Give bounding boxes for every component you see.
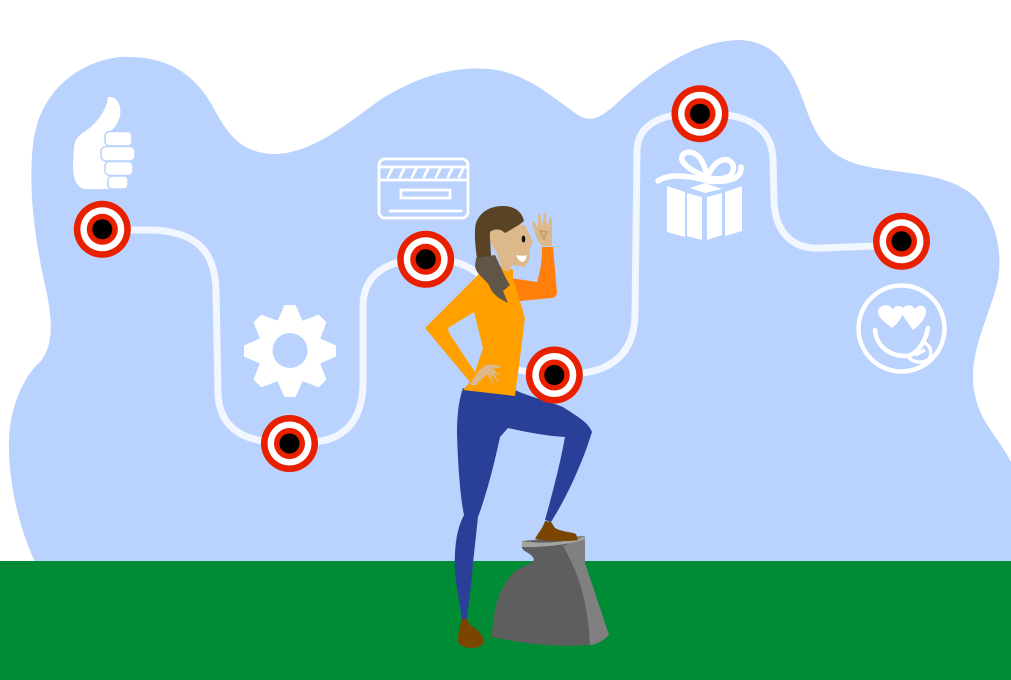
hair xyxy=(475,206,524,259)
rock xyxy=(492,536,609,646)
target 5 xyxy=(672,85,728,142)
icon: gear xyxy=(244,305,336,397)
target 6 xyxy=(873,213,930,270)
smile xyxy=(516,255,527,262)
left shoe xyxy=(458,619,484,648)
icon: smiley with heart eyes xyxy=(858,286,944,372)
journey path xyxy=(102,113,902,442)
raised arm xyxy=(510,247,557,301)
target 1 xyxy=(74,201,131,258)
hand raised xyxy=(532,213,552,246)
neck and face xyxy=(495,224,533,272)
person xyxy=(425,206,592,648)
legs xyxy=(455,388,592,619)
eye xyxy=(522,236,525,242)
ground xyxy=(0,561,1011,680)
icon: gift box xyxy=(658,152,742,240)
target 2 xyxy=(261,415,318,472)
icon: thumbs up xyxy=(73,97,135,189)
background blob xyxy=(9,40,1011,562)
icon: clapperboard xyxy=(379,159,468,218)
ear xyxy=(490,230,505,252)
sweater torso and arm xyxy=(425,265,525,396)
hand on hip xyxy=(470,365,502,385)
target 4 xyxy=(526,346,583,404)
right shoe xyxy=(535,521,578,541)
ponytail xyxy=(475,255,510,303)
target 3 xyxy=(397,231,454,288)
